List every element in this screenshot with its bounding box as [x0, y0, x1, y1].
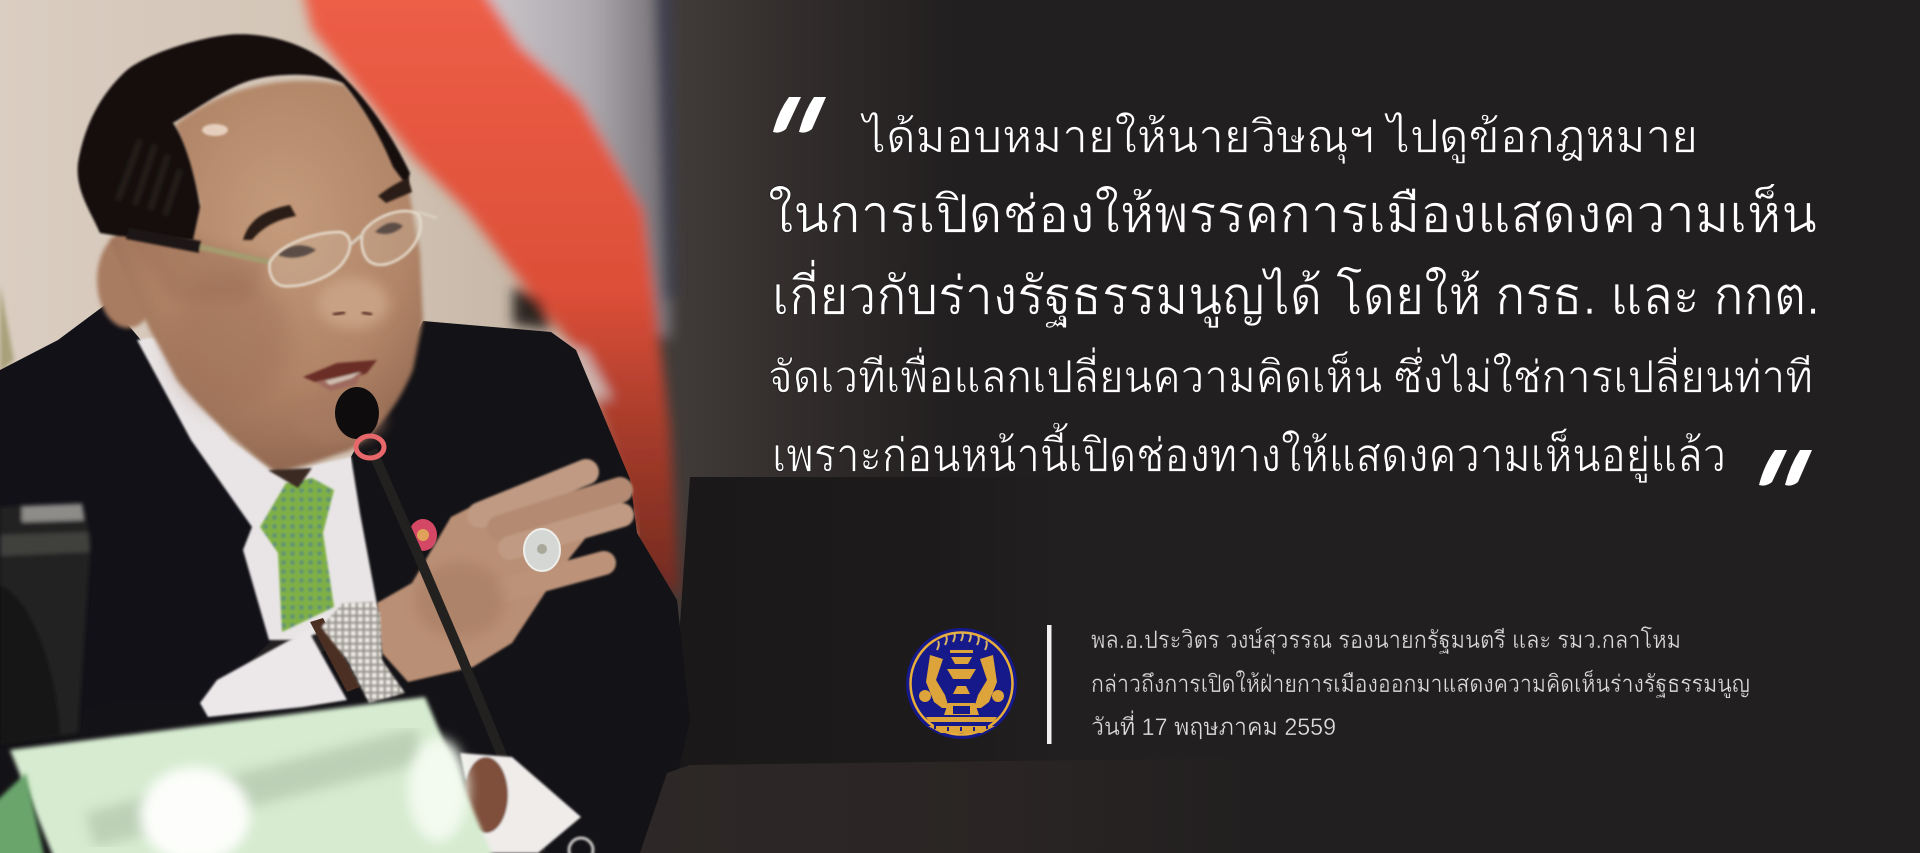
seal: flames at the top	[937, 632, 987, 650]
wristwatch	[321, 602, 405, 703]
Thai flag	[300, 0, 680, 600]
tie	[260, 478, 334, 632]
eyes	[278, 223, 403, 258]
shirt cuff	[200, 630, 347, 717]
mouth	[303, 360, 377, 391]
attribution line 1: พล.อ.ประวิตร วงษ์สุวรรณ รองนายกรัฐมนตรี และ รมว.กลาโหม	[1091, 626, 1681, 655]
plant at the left edge	[0, 285, 14, 372]
glasses	[127, 211, 437, 286]
ear	[97, 232, 159, 328]
ring	[524, 529, 560, 571]
wall behind the speaker	[0, 0, 640, 620]
collar shadow	[268, 468, 312, 488]
government seal icon	[906, 628, 1017, 739]
photo: minister speaking at a microphone	[0, 0, 1250, 853]
desk monitor, left	[0, 503, 91, 745]
suit jacket	[0, 302, 690, 853]
nostrils	[333, 312, 372, 315]
attribution line 2: กล่าวถึงการเปิดให้ฝ่ายการเมืองออกมาแสดงความคิดเห็นร่างรัฐธรรมนูญ	[1091, 669, 1750, 699]
hand	[377, 472, 622, 682]
lower sleeve and wrist	[460, 753, 593, 853]
lapel pin	[409, 519, 437, 551]
vertical divider	[1047, 625, 1052, 744]
hair	[78, 34, 410, 240]
desk monitor, lower right	[640, 758, 1250, 853]
attribution line 3: วันที่ 17 พฤษภาคม 2559	[1091, 710, 1336, 741]
opening quotation mark	[773, 97, 826, 133]
microphone	[335, 387, 542, 853]
closing quotation mark	[1759, 450, 1812, 486]
bracelet beads	[310, 618, 360, 692]
attribution text	[1091, 626, 1750, 741]
face	[110, 81, 423, 473]
quote text	[768, 111, 1820, 483]
quote line 4: จัดเวทีเพื่อแลกเปลี่ยนความคิดเห็น ซึ่งไม่ใช่การเปลี่ยนท่าที	[768, 346, 1813, 402]
quote line 5: เพราะก่อนหน้านี้เปิดช่องทางให้แสดงความเห็นอยู่แล้ว	[772, 422, 1726, 483]
quote line 3: เกี่ยวกับร่างรัฐธรรมนูญได้ โดยให้ กรธ. และ กกต.	[772, 259, 1820, 328]
monitor silhouette behind the speaker	[670, 477, 1060, 770]
seal: lions, vessel and pedestal	[919, 650, 1004, 733]
shirt collar and front	[137, 337, 378, 640]
name plate	[0, 697, 500, 853]
quote line 1: ได้มอบหมายให้นายวิษณุฯ ไปดูข้อกฎหมาย	[860, 111, 1698, 164]
quote line 2: ในการเปิดช่องให้พรรคการเมืองแสดงความเห็น	[768, 184, 1817, 244]
dark backdrop fading into the panel	[640, 0, 950, 853]
eyebrows	[243, 178, 412, 240]
